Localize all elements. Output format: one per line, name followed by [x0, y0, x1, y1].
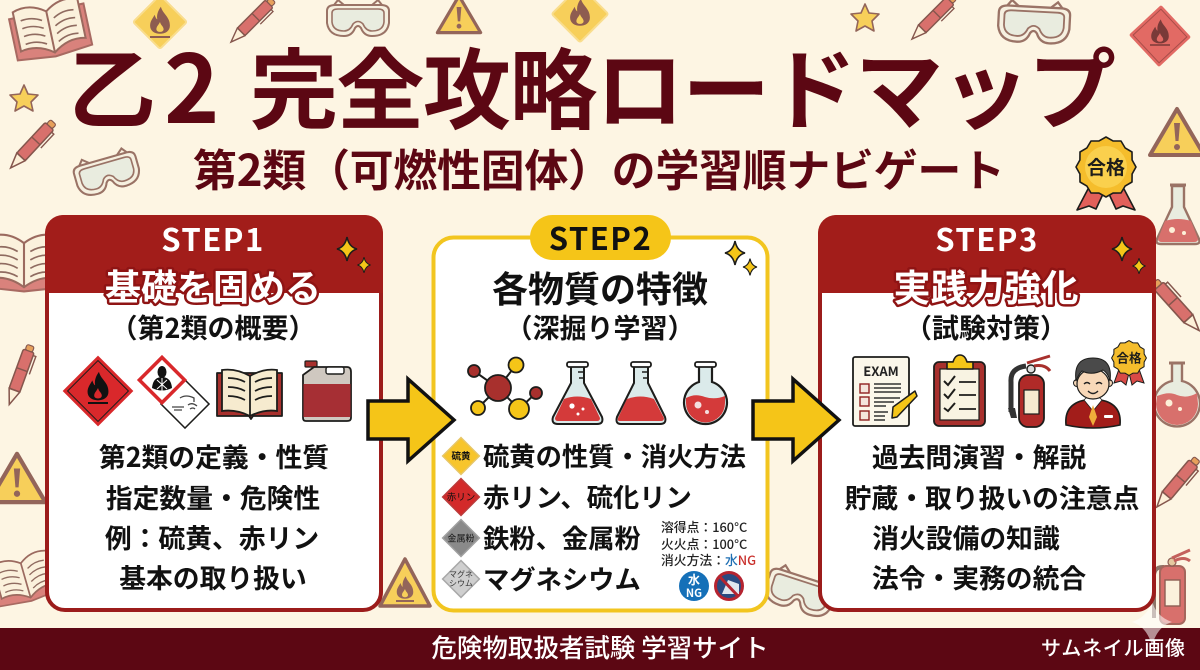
pass medal: 合格: [1087, 153, 1125, 180]
icon: warning lower left: [0, 454, 45, 502]
badge: metal powder: [443, 520, 479, 556]
step 1 list: 指定数量・危険性: [106, 477, 320, 516]
pass medal: [1076, 137, 1136, 210]
sparkles: [337, 237, 370, 273]
substance list: [443, 435, 746, 597]
icon: goggles bottom: [762, 562, 839, 620]
icon: warning flame bottom: [380, 559, 430, 606]
icon: pen top: [227, 0, 279, 48]
icon: water NG: NG: [686, 585, 702, 601]
footer bar: [0, 628, 1200, 670]
badge: sulfur: 硫黄: [451, 448, 471, 462]
step 3 header: [818, 215, 1156, 293]
icon: flammable placard: [63, 356, 133, 426]
icon: book left partially hidden: [0, 235, 64, 291]
badge: red phosphorus: [443, 479, 479, 515]
footer note: サムネイル画像: [1041, 632, 1185, 661]
badge: magnesium: [443, 561, 479, 597]
icon: pen right: [1150, 275, 1200, 335]
badge: metal powder: 金属粉: [447, 532, 475, 544]
icon: molecule: [468, 358, 542, 419]
icon: clipboard: [934, 355, 985, 426]
icon: water NG: [679, 571, 709, 601]
icon: goggles top: [327, 0, 389, 36]
title: 完全攻略ロードマップ: [250, 21, 1116, 148]
icon: pass medal small: 合格: [1116, 348, 1142, 366]
badge: magnesium: マグネ: [449, 569, 473, 580]
arrow: step 2 to step 3: [753, 379, 839, 461]
icon: yellow flame diamond: [133, 0, 187, 49]
step 1 header: [45, 215, 383, 293]
list text: red phosphorus: 赤リン、硫化リン: [483, 476, 692, 515]
step 1 subheading: （第2類の概要）: [111, 307, 315, 346]
subtitle: 第2類（可燃性固体）の学習順ナビゲート: [193, 135, 1005, 199]
panel: step 2: [434, 214, 768, 610]
title: 2: [164, 15, 219, 151]
panel: step 3: [818, 215, 1156, 610]
badge: magnesium: シウム: [449, 578, 473, 589]
list text: magnesium: マグネシウム: [483, 558, 641, 597]
sparkles: [725, 241, 757, 275]
icon: pen lower right: [1152, 455, 1200, 513]
icon: flame diamond top: [552, 0, 608, 42]
icon: star left: [10, 85, 38, 111]
icon: warning top: [437, 0, 481, 33]
icon: pen lower left: [4, 344, 39, 407]
icon: round flask: [684, 362, 727, 424]
icon: pass medal small: [1112, 341, 1146, 385]
step 3 list: 法令・実務の統合: [872, 557, 1086, 596]
step 3 list: [845, 436, 1139, 596]
step 3 heading: 実践力強化: [894, 258, 1078, 312]
step 3 list: 貯蔵・取り扱いの注意点: [845, 477, 1139, 516]
icon: warning right: [1150, 109, 1200, 155]
icon: extinguisher lower right: [1154, 550, 1190, 624]
step 2 subheading: （深掘り学習）: [506, 307, 694, 346]
icon: flask 2: [616, 362, 665, 424]
step 3 list: 過去問演習・解説: [872, 436, 1086, 475]
step 2 label: STEP2: [549, 214, 652, 259]
step 1 heading: 基礎を固める: [105, 259, 321, 311]
icon: book top left: [7, 0, 93, 64]
data note: 消火方法：水NG: [661, 550, 756, 569]
icon: star top right: [851, 4, 879, 31]
step 3 list: 消火設備の知識: [872, 517, 1060, 556]
icon: flask right: [1156, 185, 1200, 244]
step 2 pill: [530, 215, 671, 260]
data note: 火火点：100°C: [661, 534, 747, 553]
title: 乙: [68, 21, 156, 148]
icon: health and corrosive placards: [139, 357, 209, 428]
icon: fire extinguisher: [1008, 356, 1050, 427]
step 1 list: 基本の取り扱い: [119, 557, 307, 596]
step 1 list: 第2類の定義・性質: [99, 436, 329, 475]
panel: step 1: [45, 215, 383, 610]
icon: exam sheet: [853, 357, 917, 426]
step 1 label: STEP1: [161, 215, 265, 260]
icon: pen top right: [908, 0, 960, 45]
step 2 heading: 各物質の特徴: [492, 261, 708, 313]
badge: red phosphorus: 赤リン: [447, 490, 475, 504]
decorative sparkle over footer: [1132, 600, 1172, 645]
icon: open book: [217, 370, 282, 419]
icon: goggles left: [71, 145, 143, 199]
arrow: step 1 to step 2: [368, 379, 454, 461]
footer title: 危険物取扱者試験 学習サイト: [431, 628, 769, 665]
data note: 溶得点：160°C: [661, 517, 747, 536]
badge: sulfur: [443, 438, 479, 474]
icon: water NG: 水: [688, 571, 700, 588]
icon: pen left: [6, 118, 60, 174]
icon: chemical can: [303, 361, 351, 421]
step 1 list: 例：硫黄、赤リン: [105, 517, 319, 556]
step 1 list: [99, 436, 329, 596]
data note: [661, 517, 756, 569]
step 3 label: STEP3: [935, 215, 1039, 260]
list text: sulfur: 硫黄の性質・消火方法: [483, 435, 746, 474]
icon: red flame placard: [1129, 5, 1191, 67]
sparkles: [1112, 237, 1146, 274]
step 3 subheading: （試験対策）: [905, 307, 1067, 346]
icon: book lower left: [0, 548, 63, 610]
icon: exam sheet: EXAM: [863, 361, 899, 380]
icon: round flask right: [1154, 363, 1200, 426]
icon: successful person: [1066, 358, 1120, 428]
icon: flask 1: [553, 362, 602, 424]
list text: metal powder: 鉄粉、金属粉: [483, 517, 641, 556]
icon: goggles top right: [997, 0, 1071, 44]
icon: no water spray: [716, 572, 742, 600]
